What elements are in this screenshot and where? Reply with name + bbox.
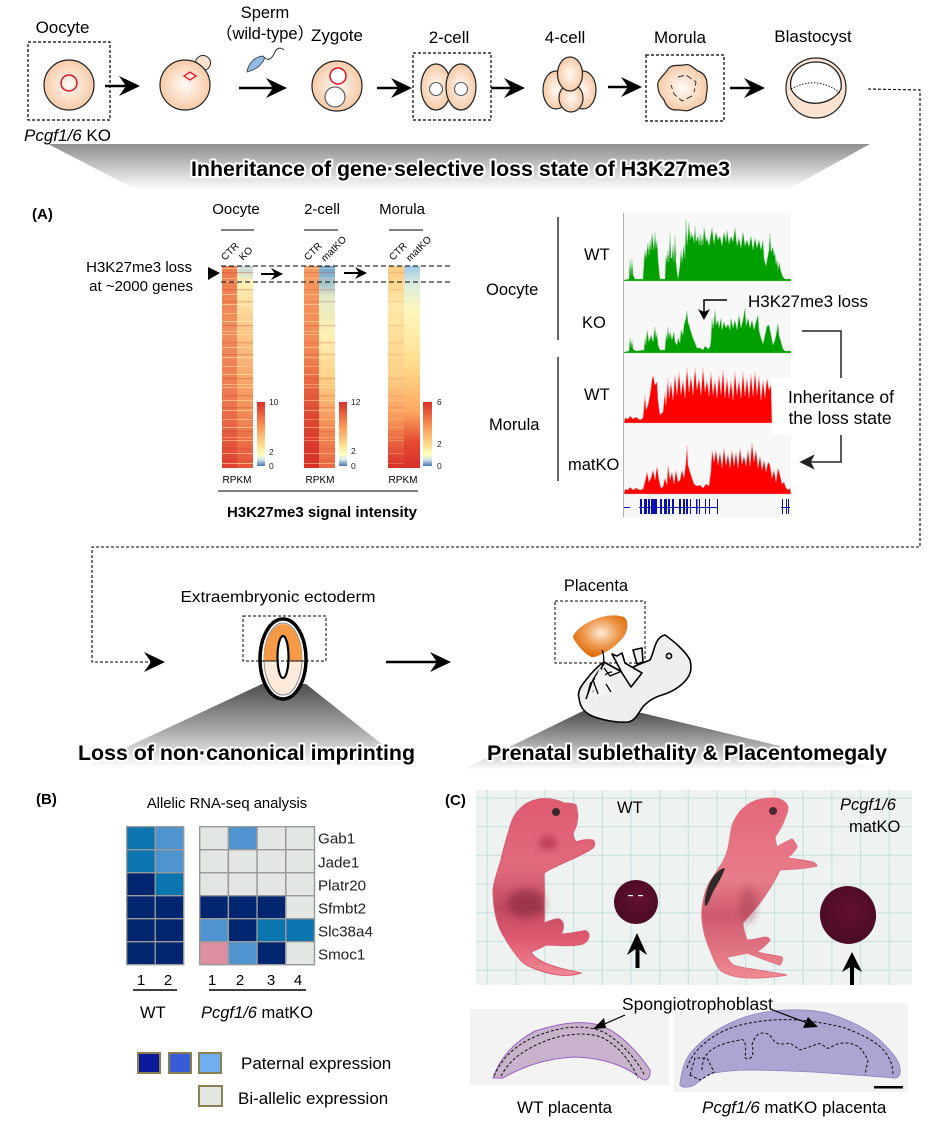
arrow: 2-cell to 4-cell (491, 78, 525, 98)
label: Morula: Morula (654, 28, 707, 47)
icon: WT placenta (614, 880, 658, 924)
icon: placenta (572, 615, 628, 658)
photo: pups on grid paper (476, 790, 912, 985)
label: WT: WT (617, 799, 643, 817)
group labels: WT (140, 1004, 166, 1022)
panel: fetus and placenta (462, 577, 887, 770)
RPKM labels: RPKM (389, 475, 417, 486)
RPKM labels (223, 475, 417, 486)
label: H3K27me3 signal intensity: H3K27me3 signal intensity (227, 504, 418, 521)
sample numbers: 2 (236, 972, 244, 989)
colour scale bars: 2 (351, 446, 356, 456)
RPKM labels: RPKM (306, 475, 334, 486)
gene labels: Slc38a4 (318, 924, 373, 940)
label: Spongiotrophoblast: Spongiotrophoblast (622, 994, 773, 1014)
label: Pcgf1/6 matKO (840, 796, 901, 836)
icon: matKO placenta (813, 880, 883, 950)
legend (138, 1053, 222, 1106)
icon: blastocyst (786, 58, 846, 118)
sample numbers: 1 (137, 972, 145, 989)
dashed box (243, 616, 326, 661)
banner: Inheritance of gene-selective loss state (48, 144, 870, 190)
colour scale bars: 0 (269, 461, 274, 471)
column labels: CTR (302, 241, 325, 263)
bent arrow: H3K27me3 loss (698, 300, 727, 320)
label: Pcgf1/6 matKO: matKO (849, 818, 901, 836)
label: Pcgf1/6 matKO: Pcgf1/6 (840, 796, 897, 814)
heatmap titles (212, 201, 426, 230)
row labels: WT (584, 246, 610, 264)
heatmap titles: Morula (379, 201, 426, 218)
banner: Inheritance of gene-selective loss state: Inheritance of gene·selective loss state of H3K27me3 (191, 158, 730, 181)
gene labels: Sfmbt2 (318, 900, 366, 918)
panel A right: genome tracks (486, 213, 894, 517)
arrow: sperm fertilisation (239, 78, 287, 98)
colour scale bars: 12 (351, 397, 361, 407)
heatmap table: WT (127, 827, 184, 965)
sample numbers: 2 (164, 972, 172, 989)
label: H3K27me3 loss at ~2000 genes (86, 259, 193, 295)
label: Inheritance of the loss state: the loss state (788, 408, 892, 428)
arrows: spongiotrophoblast pointers (593, 1009, 818, 1029)
label: (A): (A) (32, 206, 53, 223)
icon: matKO pup (702, 798, 817, 978)
column labels: matKO (404, 234, 434, 264)
track: morula matKO (624, 443, 791, 494)
label: Sperm (wild-type): Sperm (241, 4, 289, 22)
track background (624, 213, 791, 517)
label: H3K27me3 loss: H3K27me3 loss (748, 292, 868, 311)
dashed box (555, 601, 645, 663)
legend text (238, 1054, 391, 1108)
arrow: 4-cell to morula (608, 77, 642, 97)
row labels: Morula (489, 416, 540, 434)
column labels: CTR (387, 241, 410, 263)
sample numbers: 4 (294, 972, 302, 989)
arrow: oocyte to fertilised egg (105, 76, 140, 96)
legend text: Paternal expression (241, 1054, 391, 1073)
icon: 4-cell embryo (543, 57, 596, 112)
gene labels: Jade1 (318, 854, 359, 872)
label: Placenta: Placenta (564, 577, 629, 595)
icon: morula in dashed box (646, 55, 724, 121)
gene labels (318, 830, 373, 964)
icon: 2-cell embryo in dashed box (413, 53, 491, 120)
panel: embryo development series (24, 4, 852, 145)
heading: Loss of non-canonical imprinting: Loss of non·canonical imprinting (78, 741, 415, 765)
icon: egg with polar body (160, 56, 210, 110)
column labels: KO (237, 245, 255, 263)
label: Blastocyst: Blastocyst (774, 27, 852, 46)
white gap behind text (772, 378, 802, 435)
row labels: KO (582, 314, 606, 332)
group labels (140, 1004, 313, 1022)
chart title: Allelic RNA-seq analysis (147, 796, 307, 812)
icon: sperm (247, 48, 284, 72)
label: 2-cell: 2-cell (429, 28, 469, 47)
column labels: CTR (219, 241, 242, 263)
cone: gray gradient (82, 684, 412, 768)
row labels (486, 246, 620, 474)
label: H3K27me3 loss at ~2000 genes: H3K27me3 loss (86, 259, 192, 276)
heading: Prenatal sublethality & Placentomegaly: Prenatal sublethality & Placentomegaly (487, 742, 887, 765)
scale bar (874, 1086, 903, 1088)
sample numbers: 1 (208, 972, 216, 989)
icon: zygote (312, 61, 362, 111)
label: Sperm (wild-type): （wild-type） (216, 24, 314, 43)
label: (B): (B) (36, 791, 57, 808)
group labels: Pcgf1/6 matKO (201, 1004, 313, 1022)
colour scale bars: 6 (437, 397, 442, 407)
heatmap: morula (388, 266, 420, 468)
icon: fetus (578, 635, 691, 722)
RPKM labels: RPKM (223, 475, 251, 486)
captions: Pcgf1/6 matKO placenta (702, 1098, 887, 1117)
label: Oocyte: Oocyte (36, 18, 89, 37)
colour scale bars: 2 (437, 439, 442, 449)
label: Zygote: Zygote (311, 26, 363, 45)
axis line (623, 213, 624, 517)
arrow: morula to blastocyst (730, 78, 765, 98)
panel C: photographs (445, 790, 912, 1117)
captions (517, 1098, 887, 1117)
legend text: Bi-allelic expression (238, 1089, 388, 1108)
label: Inheritance of the loss state: Inheritance of (788, 387, 894, 407)
gene labels: Smoc1 (318, 946, 365, 964)
column labels (219, 234, 434, 264)
track: gene models (624, 499, 790, 514)
colour scale bars: 0 (351, 461, 356, 471)
panel: extraembryonic ectoderm (78, 589, 415, 768)
label: Inheritance of the loss state (788, 387, 894, 428)
icon: WT arrow (627, 933, 647, 968)
track: oocyte WT (624, 219, 791, 281)
colour scale bars (257, 397, 442, 471)
marker triangle (208, 267, 220, 280)
row labels: WT (584, 386, 610, 404)
row labels: Oocyte (486, 281, 538, 299)
label: (C): (C) (445, 792, 466, 809)
colour scale bars: 10 (269, 397, 279, 407)
heatmap titles: Oocyte (212, 201, 260, 218)
label: Extraembryonic ectoderm: Extraembryonic ectoderm (180, 589, 376, 606)
colour scale bars: 0 (437, 461, 442, 471)
label: 4-cell: 4-cell (545, 28, 585, 47)
track: oocyte KO (624, 308, 791, 353)
cone: gray gradient (462, 711, 880, 770)
small arrows between stages (261, 267, 367, 280)
axis line (218, 490, 418, 492)
arrow: ectoderm to placenta (386, 652, 451, 672)
bracket arrow: inheritance (801, 331, 841, 468)
column labels: matKO (319, 234, 349, 264)
heatmap: oocyte (222, 266, 253, 468)
label: Pcgf1/6 KO: Pcgf1/6 KO (24, 126, 111, 145)
gene labels: Gab1 (318, 830, 355, 848)
captions: WT placenta (517, 1098, 613, 1117)
dashed selection lines (221, 266, 450, 282)
icon: oocyte in dashed box (28, 42, 110, 120)
sample numbers (133, 972, 306, 990)
heatmap: 2-cell (304, 266, 335, 468)
colour scale bars: 2 (269, 447, 274, 457)
row brackets (557, 217, 559, 481)
connector: dashed path from blastocyst to extraembryonic ectoderm (92, 89, 920, 672)
row labels: matKO (568, 456, 620, 474)
icon: matKO arrow (842, 952, 862, 985)
sample numbers: 3 (267, 972, 275, 989)
label: H3K27me3 loss at ~2000 genes: at ~2000 genes (89, 278, 193, 295)
gene labels: Platr20 (318, 878, 366, 894)
heatmap titles: 2-cell (304, 201, 340, 218)
panel A left: heatmaps (86, 201, 450, 521)
histology: matKO placenta (674, 1003, 908, 1092)
icon: embryo cup (260, 619, 306, 699)
arrow: zygote to 2-cell (377, 78, 412, 98)
panel B: allelic expression (36, 791, 391, 1108)
histology: WT placenta (470, 1009, 669, 1085)
icon: WT pup (493, 799, 594, 975)
track: morula WT (624, 368, 772, 423)
heatmap table: matKO (200, 827, 314, 965)
